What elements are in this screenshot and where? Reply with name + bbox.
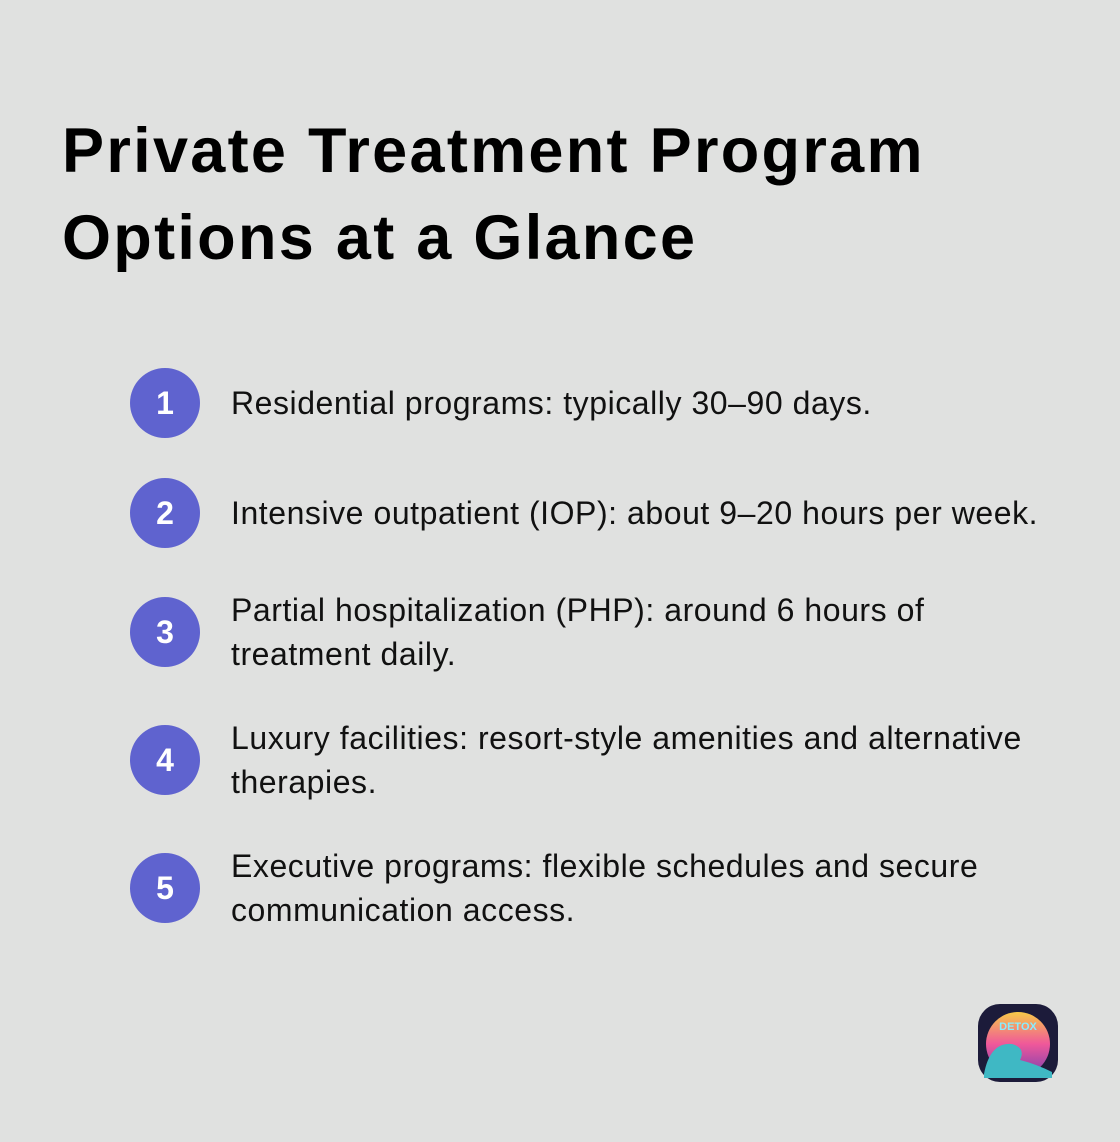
item 3: treatment daily. bbox=[231, 636, 456, 672]
title: Options at a Glance bbox=[62, 203, 697, 273]
item 2 bbox=[130, 478, 1038, 548]
logo bbox=[978, 1004, 1058, 1082]
item 1: 1 bbox=[156, 385, 174, 421]
item 2: Intensive outpatient (IOP): about 9–20 hours per week. bbox=[231, 495, 1038, 531]
item 5: Executive programs: flexible schedules and secure bbox=[231, 848, 978, 884]
item 4: 4 bbox=[156, 742, 174, 778]
item 2: 2 bbox=[156, 495, 174, 531]
item 4: therapies. bbox=[231, 764, 377, 800]
item 3: Partial hospitalization (PHP): around 6 hours of bbox=[231, 592, 924, 628]
item 5: communication access. bbox=[231, 892, 575, 928]
item 4 bbox=[130, 720, 1022, 800]
item 5 bbox=[130, 848, 978, 928]
item 4: Luxury facilities: resort-style amenities and alternative bbox=[231, 720, 1022, 756]
item 3 bbox=[130, 592, 924, 672]
item 1 bbox=[130, 368, 872, 438]
logo: DETOX bbox=[999, 1021, 1038, 1033]
item 3: 3 bbox=[156, 614, 174, 650]
item 5: 5 bbox=[156, 870, 174, 906]
title: Private Treatment Program bbox=[62, 116, 925, 186]
title bbox=[62, 116, 925, 273]
item 1: Residential programs: typically 30–90 days. bbox=[231, 385, 872, 421]
